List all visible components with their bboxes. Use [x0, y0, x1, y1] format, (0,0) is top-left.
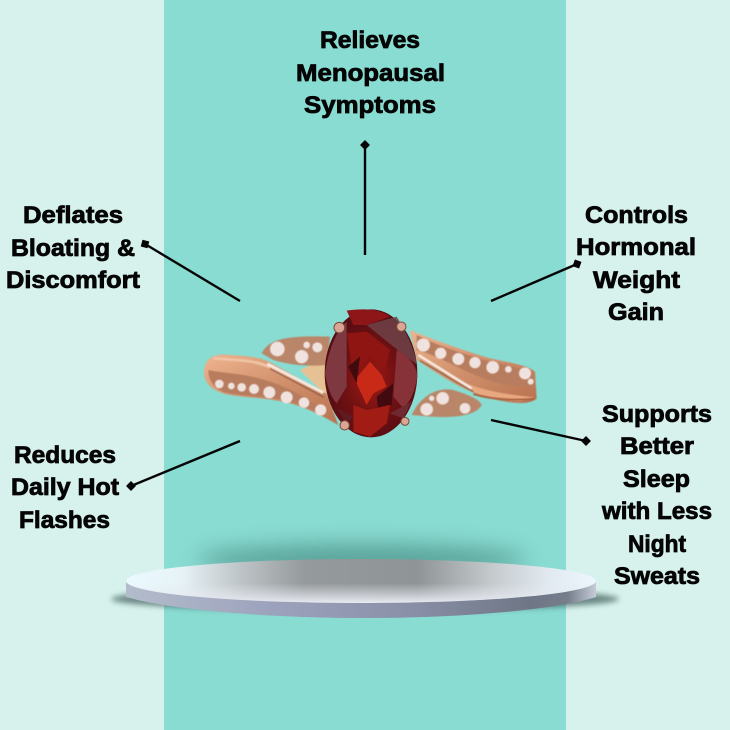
heading: Supports Better Sleep with Less Night Sweats: Night — [628, 531, 686, 558]
heading: Supports Better Sleep with Less Night Sweats: Supports — [602, 401, 712, 428]
ring inner metal — [300, 358, 327, 397]
heading: Supports Better Sleep with Less Night Sweats: Sweats — [614, 563, 700, 590]
arrow: top pointer — [360, 140, 370, 255]
heading: Deflates Bloating & Discomfort — [6, 202, 140, 294]
heading: Relieves Menopausal Symptoms: Menopausal — [296, 60, 445, 87]
ring right shank — [410, 330, 537, 403]
ring illustration — [204, 309, 537, 437]
heading: Controls Hormonal Weight Gain: Gain — [608, 299, 664, 326]
platform: side wall — [126, 582, 596, 618]
background: centre teal band — [164, 0, 566, 730]
ring gemstone — [325, 309, 417, 437]
ring lower right leaf — [412, 389, 482, 417]
heading: Reduces Daily Hot Flashes — [11, 442, 119, 534]
platform: upper shadow — [197, 544, 527, 576]
heading: Reduces Daily Hot Flashes: Flashes — [19, 507, 110, 534]
heading: Relieves Menopausal Symptoms — [296, 27, 445, 119]
heading: Controls Hormonal Weight Gain — [576, 202, 696, 326]
ring upper left leaf — [262, 336, 330, 366]
heading: Reduces Daily Hot Flashes: Daily Hot — [11, 474, 119, 501]
heading: Supports Better Sleep with Less Night Sweats — [601, 401, 712, 590]
heading: Relieves Menopausal Symptoms: Relieves — [320, 27, 420, 54]
heading: Controls Hormonal Weight Gain: Hormonal — [576, 234, 696, 261]
arrow: lower left pointer — [126, 441, 240, 491]
heading: Supports Better Sleep with Less Night Sweats: with Less — [601, 498, 712, 525]
ring pave diamonds — [215, 338, 534, 416]
arrow: lower right pointer — [491, 420, 591, 446]
heading: Supports Better Sleep with Less Night Sweats: Better — [620, 433, 694, 460]
heading: Controls Hormonal Weight Gain: Weight — [593, 267, 680, 294]
heading: Deflates Bloating & Discomfort: Bloating & — [11, 235, 135, 262]
arrow: upper right pointer — [491, 260, 581, 301]
platform pedestal — [111, 544, 619, 618]
heading: Supports Better Sleep with Less Night Sweats: Sleep — [623, 466, 690, 493]
heading: Reduces Daily Hot Flashes: Reduces — [14, 442, 116, 469]
heading: Deflates Bloating & Discomfort: Discomfort — [6, 267, 140, 294]
arrow: upper left pointer — [141, 240, 240, 301]
heading: Deflates Bloating & Discomfort: Deflates — [23, 202, 123, 229]
ring left shank — [204, 355, 338, 425]
ring prongs — [334, 322, 409, 430]
platform: front fade — [126, 559, 596, 603]
platform: top surface — [126, 559, 596, 603]
platform: ground shadow — [111, 587, 619, 611]
heading: Controls Hormonal Weight Gain: Controls — [585, 202, 688, 229]
heading: Relieves Menopausal Symptoms: Symptoms — [304, 92, 436, 119]
